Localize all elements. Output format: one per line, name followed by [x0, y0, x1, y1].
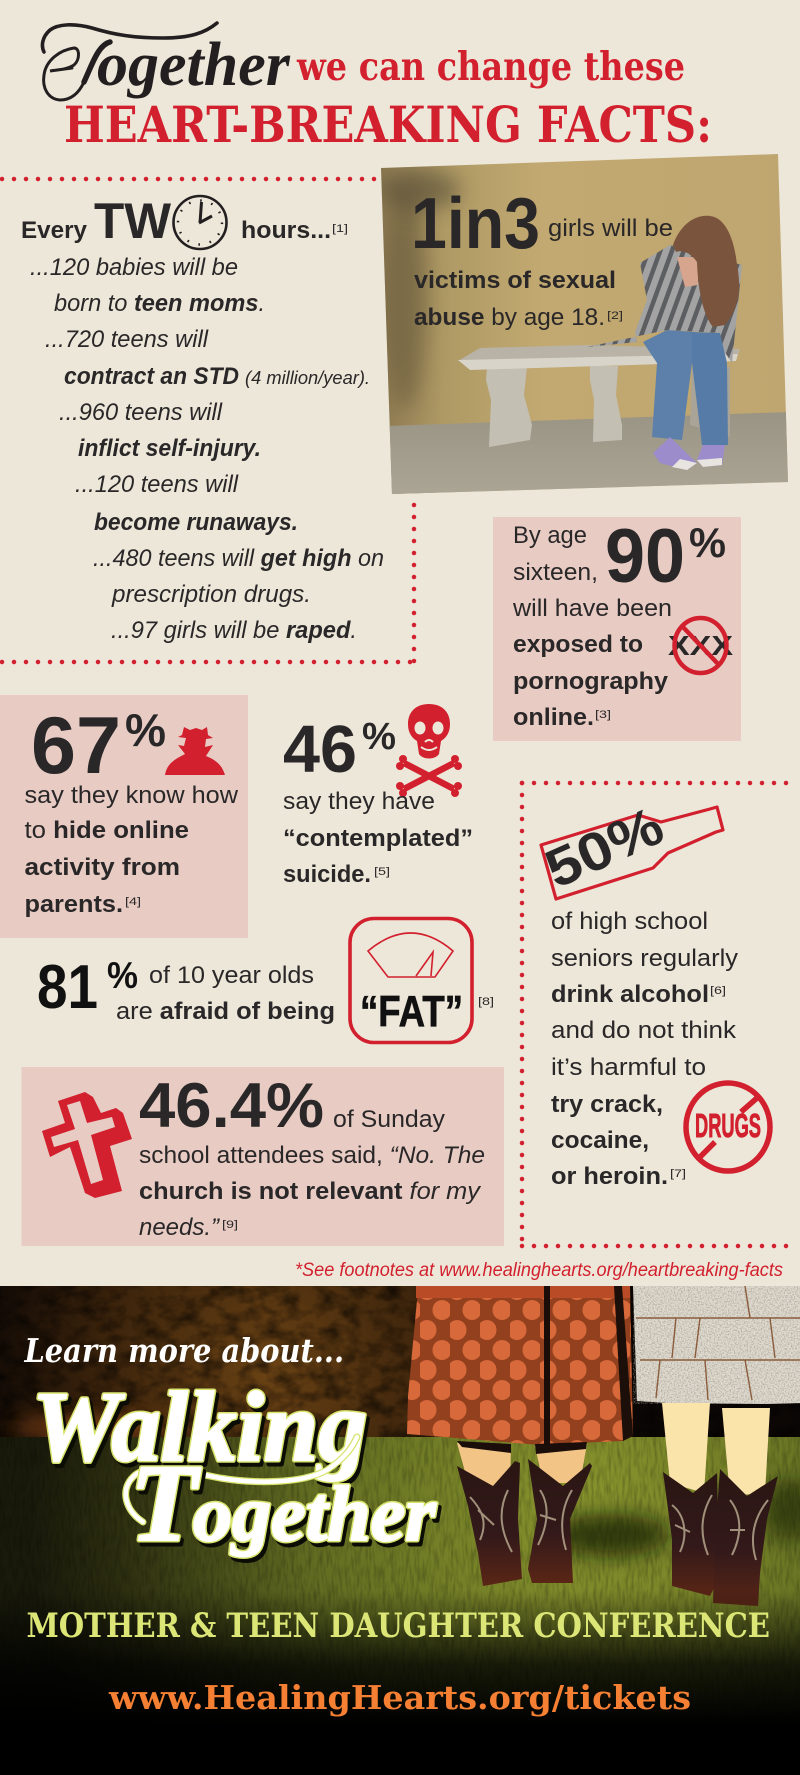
panel text: activity from — [24, 854, 180, 881]
text: try crack, — [551, 1091, 663, 1118]
heading line 1: we can change these — [296, 44, 685, 90]
headline: every two hours: TW — [94, 193, 172, 249]
footnote link: *See footnotes at www.healinghearts.org/heartbreaking-facts — [295, 1260, 783, 1281]
text: or heroin. — [551, 1163, 668, 1190]
text — [551, 908, 738, 1190]
stat block: 46% suicide — [283, 704, 473, 888]
text: church is not relevant for my — [139, 1178, 482, 1205]
1 in 3 stat text: [2] — [607, 310, 623, 322]
banner: conference promo — [0, 1286, 800, 1775]
girl — [587, 216, 742, 470]
dotted frame: left facts box — [2, 179, 416, 662]
every two hours facts — [21, 193, 384, 644]
panel text: [3] — [595, 709, 611, 721]
panel text: exposed to — [513, 631, 643, 658]
icon: spy — [165, 727, 225, 775]
panel text: online. — [513, 704, 594, 731]
fact lines: become runaways. — [94, 509, 298, 536]
text: “contemplated” — [283, 825, 473, 852]
stat: 46%: 46 — [283, 712, 357, 787]
panel text: say they know how — [24, 782, 239, 809]
text: cocaine, — [551, 1127, 649, 1154]
stat: 46%: % — [362, 716, 396, 758]
text: of high school — [551, 908, 708, 935]
script title: Walking Together: Walking — [32, 1371, 367, 1482]
panel text: parents. — [24, 891, 123, 918]
stat: 90%: % — [689, 519, 726, 566]
panel text: will have been — [512, 595, 672, 622]
fact lines: prescription drugs. — [111, 581, 311, 608]
photo panel: girl on bench — [375, 150, 795, 500]
bench — [458, 345, 740, 447]
fact lines: ...120 babies will be — [30, 254, 238, 281]
fact lines: ...960 teens will — [59, 399, 223, 426]
icon: no XXX — [668, 618, 733, 673]
text: suicide. — [283, 861, 371, 888]
script title: Walking Together: ogether — [193, 1470, 436, 1557]
boot stitching — [470, 1490, 768, 1560]
fact lines: ...720 teens will — [45, 326, 209, 353]
footnote mark: [8] — [478, 996, 494, 1008]
legs — [457, 1403, 770, 1496]
text: school attendees said, “No. The — [139, 1142, 485, 1169]
1 in 3 stat text: 1in3 — [411, 184, 540, 264]
fact lines — [30, 254, 384, 644]
banner photo — [0, 1286, 800, 1775]
panel text: By age — [513, 522, 587, 549]
script title: Walking Together: Walking — [35, 1375, 370, 1486]
text — [139, 1106, 485, 1241]
stat: 81% — [37, 953, 138, 1022]
text: say they have — [283, 788, 435, 815]
1 in 3 stat text: girls will be — [548, 215, 673, 242]
script word: Together — [42, 23, 291, 100]
headline: every two hours: [1] — [332, 223, 348, 235]
text: of 10 year olds — [149, 962, 314, 989]
text: needs.” — [139, 1214, 220, 1241]
text: seniors regularly — [551, 945, 738, 972]
stat: 81%: 81 — [37, 953, 98, 1022]
title — [42, 23, 712, 154]
icon: scale with FAT — [350, 918, 472, 1042]
orange dress — [407, 1286, 633, 1445]
panel: 46.4% church — [22, 1067, 504, 1246]
ticket url: www.HealingHearts.org/tickets — [108, 1678, 691, 1717]
headline: every two hours: Every — [21, 217, 88, 244]
stat: 67%: 67 — [31, 701, 121, 791]
boots — [457, 1459, 778, 1606]
icon: bottle — [541, 807, 723, 899]
text: [7] — [670, 1168, 686, 1180]
fact lines: born to teen moms. — [54, 290, 265, 317]
banner lead-in: Learn more about... — [24, 1331, 344, 1370]
icon: cross — [42, 1092, 132, 1198]
fact lines: ...120 teens will — [75, 471, 239, 498]
1 in 3 stat text — [411, 184, 673, 331]
text — [116, 962, 335, 1025]
text: are afraid of being — [116, 998, 335, 1025]
stat block: 50% alcohol — [536, 796, 770, 1190]
fact lines: ...97 girls will be raped. — [111, 617, 357, 644]
text: drink alcohol — [551, 981, 709, 1008]
text: [9] — [222, 1219, 238, 1231]
1 in 3 stat text: victims of sexual — [414, 267, 616, 294]
script title: Walking Together: Walking — [32, 1371, 367, 1482]
dotted frame: alcohol and drugs box — [522, 783, 798, 1246]
stat: 46.4%: 46.4% — [139, 1071, 324, 1141]
text: [5] — [374, 866, 390, 878]
stat: 90% — [605, 514, 726, 599]
panel text: sixteen, — [513, 559, 598, 586]
fact lines: ...480 teens will get high on — [93, 545, 384, 572]
icon: no drugs — [686, 1083, 770, 1171]
icon: no XXX: XXX — [668, 630, 733, 661]
text: of Sunday — [333, 1106, 445, 1133]
script title: Walking Together: ogether — [196, 1474, 439, 1561]
stat: 90%: 90 — [605, 514, 685, 599]
headline: every two hours — [21, 193, 348, 249]
text: [6] — [710, 985, 726, 997]
stat: 50%: 50% — [536, 796, 672, 900]
panel: 67% hide activity — [0, 695, 248, 938]
script title: Walking Together: ogether — [193, 1470, 436, 1557]
fact lines: (4 million/year). — [245, 368, 370, 388]
stat block: 81% afraid of being fat — [37, 918, 494, 1042]
stat: 46% — [283, 712, 396, 787]
heading line 2: HEART-BREAKING FACTS: — [64, 95, 712, 154]
panel: 90% pornography — [493, 514, 741, 741]
fact lines: inflict self-injury. — [78, 435, 261, 462]
text: it’s harmful to — [551, 1054, 706, 1081]
panel text: to hide online — [24, 817, 189, 844]
icon: clock — [174, 196, 226, 249]
script title: Walking Together: T — [130, 1442, 201, 1564]
panel text: [4] — [125, 896, 141, 908]
stat: 67%: % — [125, 704, 166, 756]
script title: Walking Together — [36, 1388, 442, 1563]
stat: 67% — [31, 701, 166, 791]
script title: Walking Together: T — [130, 1442, 201, 1564]
icon: scale with FAT: “FAT” — [360, 987, 463, 1036]
fact lines: contract an STD — [64, 363, 239, 390]
script word: Together: ogether — [97, 31, 291, 99]
panel text — [24, 782, 239, 918]
panel text: pornography — [513, 668, 669, 695]
script title: Walking Together: T — [133, 1446, 204, 1568]
panel text — [512, 522, 672, 731]
icon: skull and crossbones — [396, 704, 462, 797]
text — [283, 788, 473, 888]
1 in 3 stat text: abuse by age 18. — [414, 304, 605, 331]
stat: 81%: % — [107, 955, 138, 996]
headline: every two hours: hours... — [241, 217, 331, 244]
text: and do not think — [551, 1017, 737, 1044]
white dress — [633, 1286, 800, 1404]
